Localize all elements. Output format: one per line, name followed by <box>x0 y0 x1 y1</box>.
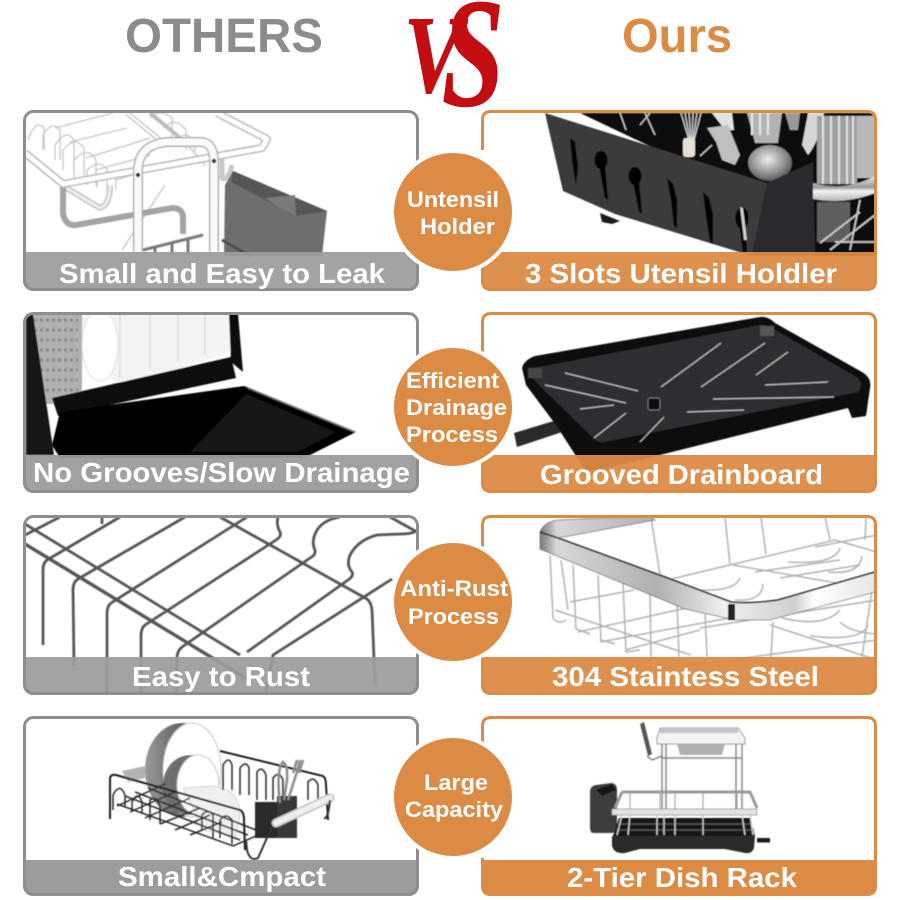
caption: 304 Staintess Steel <box>552 661 819 692</box>
caption bar <box>481 657 877 695</box>
panel border <box>24 718 418 894</box>
caption: 3 Slots Utensil Holdler <box>525 258 837 289</box>
image: light wire rack and gray holder <box>25 113 327 256</box>
badge: utensil holder: Untensil <box>407 187 499 212</box>
caption: Easy to Rust <box>132 661 310 692</box>
badge: large capacity: Large <box>424 770 488 795</box>
panel border <box>482 718 876 894</box>
badge: large capacity: Capacity <box>405 797 504 822</box>
caption: Grooved Drainboard <box>540 459 823 490</box>
caption bar <box>23 455 419 493</box>
caption bar <box>23 252 419 291</box>
caption: Small and Easy to Leak <box>59 258 385 289</box>
heading: OTHERS: OTHERS <box>125 10 323 63</box>
caption: 2-Tier Dish Rack <box>567 862 797 893</box>
heading: Ours: Ours <box>622 10 732 63</box>
badge: large capacity <box>392 736 514 858</box>
panel: ours utensil holder <box>481 110 877 291</box>
panel: others utensil holder <box>23 110 419 291</box>
panel: others drainage <box>23 309 419 493</box>
image: small black dish rack <box>110 723 330 859</box>
panel border <box>482 112 876 290</box>
image: black three slot holder with utensils <box>545 113 877 256</box>
caption: No Grooves/Slow Drainage <box>33 457 410 488</box>
badge: drainage: Process <box>406 422 498 447</box>
image: grooved black drainboard <box>514 317 870 470</box>
panel: ours capacity <box>481 716 877 896</box>
panel border <box>482 314 876 492</box>
badge: drainage <box>392 346 514 468</box>
heading: VS <box>404 0 504 139</box>
caption bar <box>481 455 877 493</box>
badge: anti-rust: Anti-Rust <box>400 576 509 601</box>
panel: others capacity <box>23 716 419 896</box>
caption bar <box>481 860 877 896</box>
image: gray wire grid <box>25 517 417 695</box>
caption: Small&Cmpact <box>118 861 326 892</box>
badge: drainage: Efficient <box>406 368 500 393</box>
image: flat black tray with plates <box>26 309 356 458</box>
caption bar <box>23 860 419 896</box>
caption bar <box>481 252 877 291</box>
panel: ours steel <box>481 515 877 695</box>
panel: ours drainboard <box>481 312 877 493</box>
panel border <box>24 112 418 290</box>
panel border <box>482 516 876 694</box>
caption bar <box>23 657 419 695</box>
badge: utensil holder: Holder <box>420 214 495 239</box>
panel border <box>24 516 418 694</box>
panel border <box>24 314 418 492</box>
panel: others rust <box>23 515 419 695</box>
badge: anti-rust <box>392 541 514 663</box>
image: stainless steel wire basket <box>538 518 874 657</box>
badge: utensil holder <box>392 151 514 273</box>
image: two tier dish rack <box>590 722 770 853</box>
badge: anti-rust: Process <box>408 604 499 629</box>
badge: drainage: Drainage <box>406 395 507 420</box>
